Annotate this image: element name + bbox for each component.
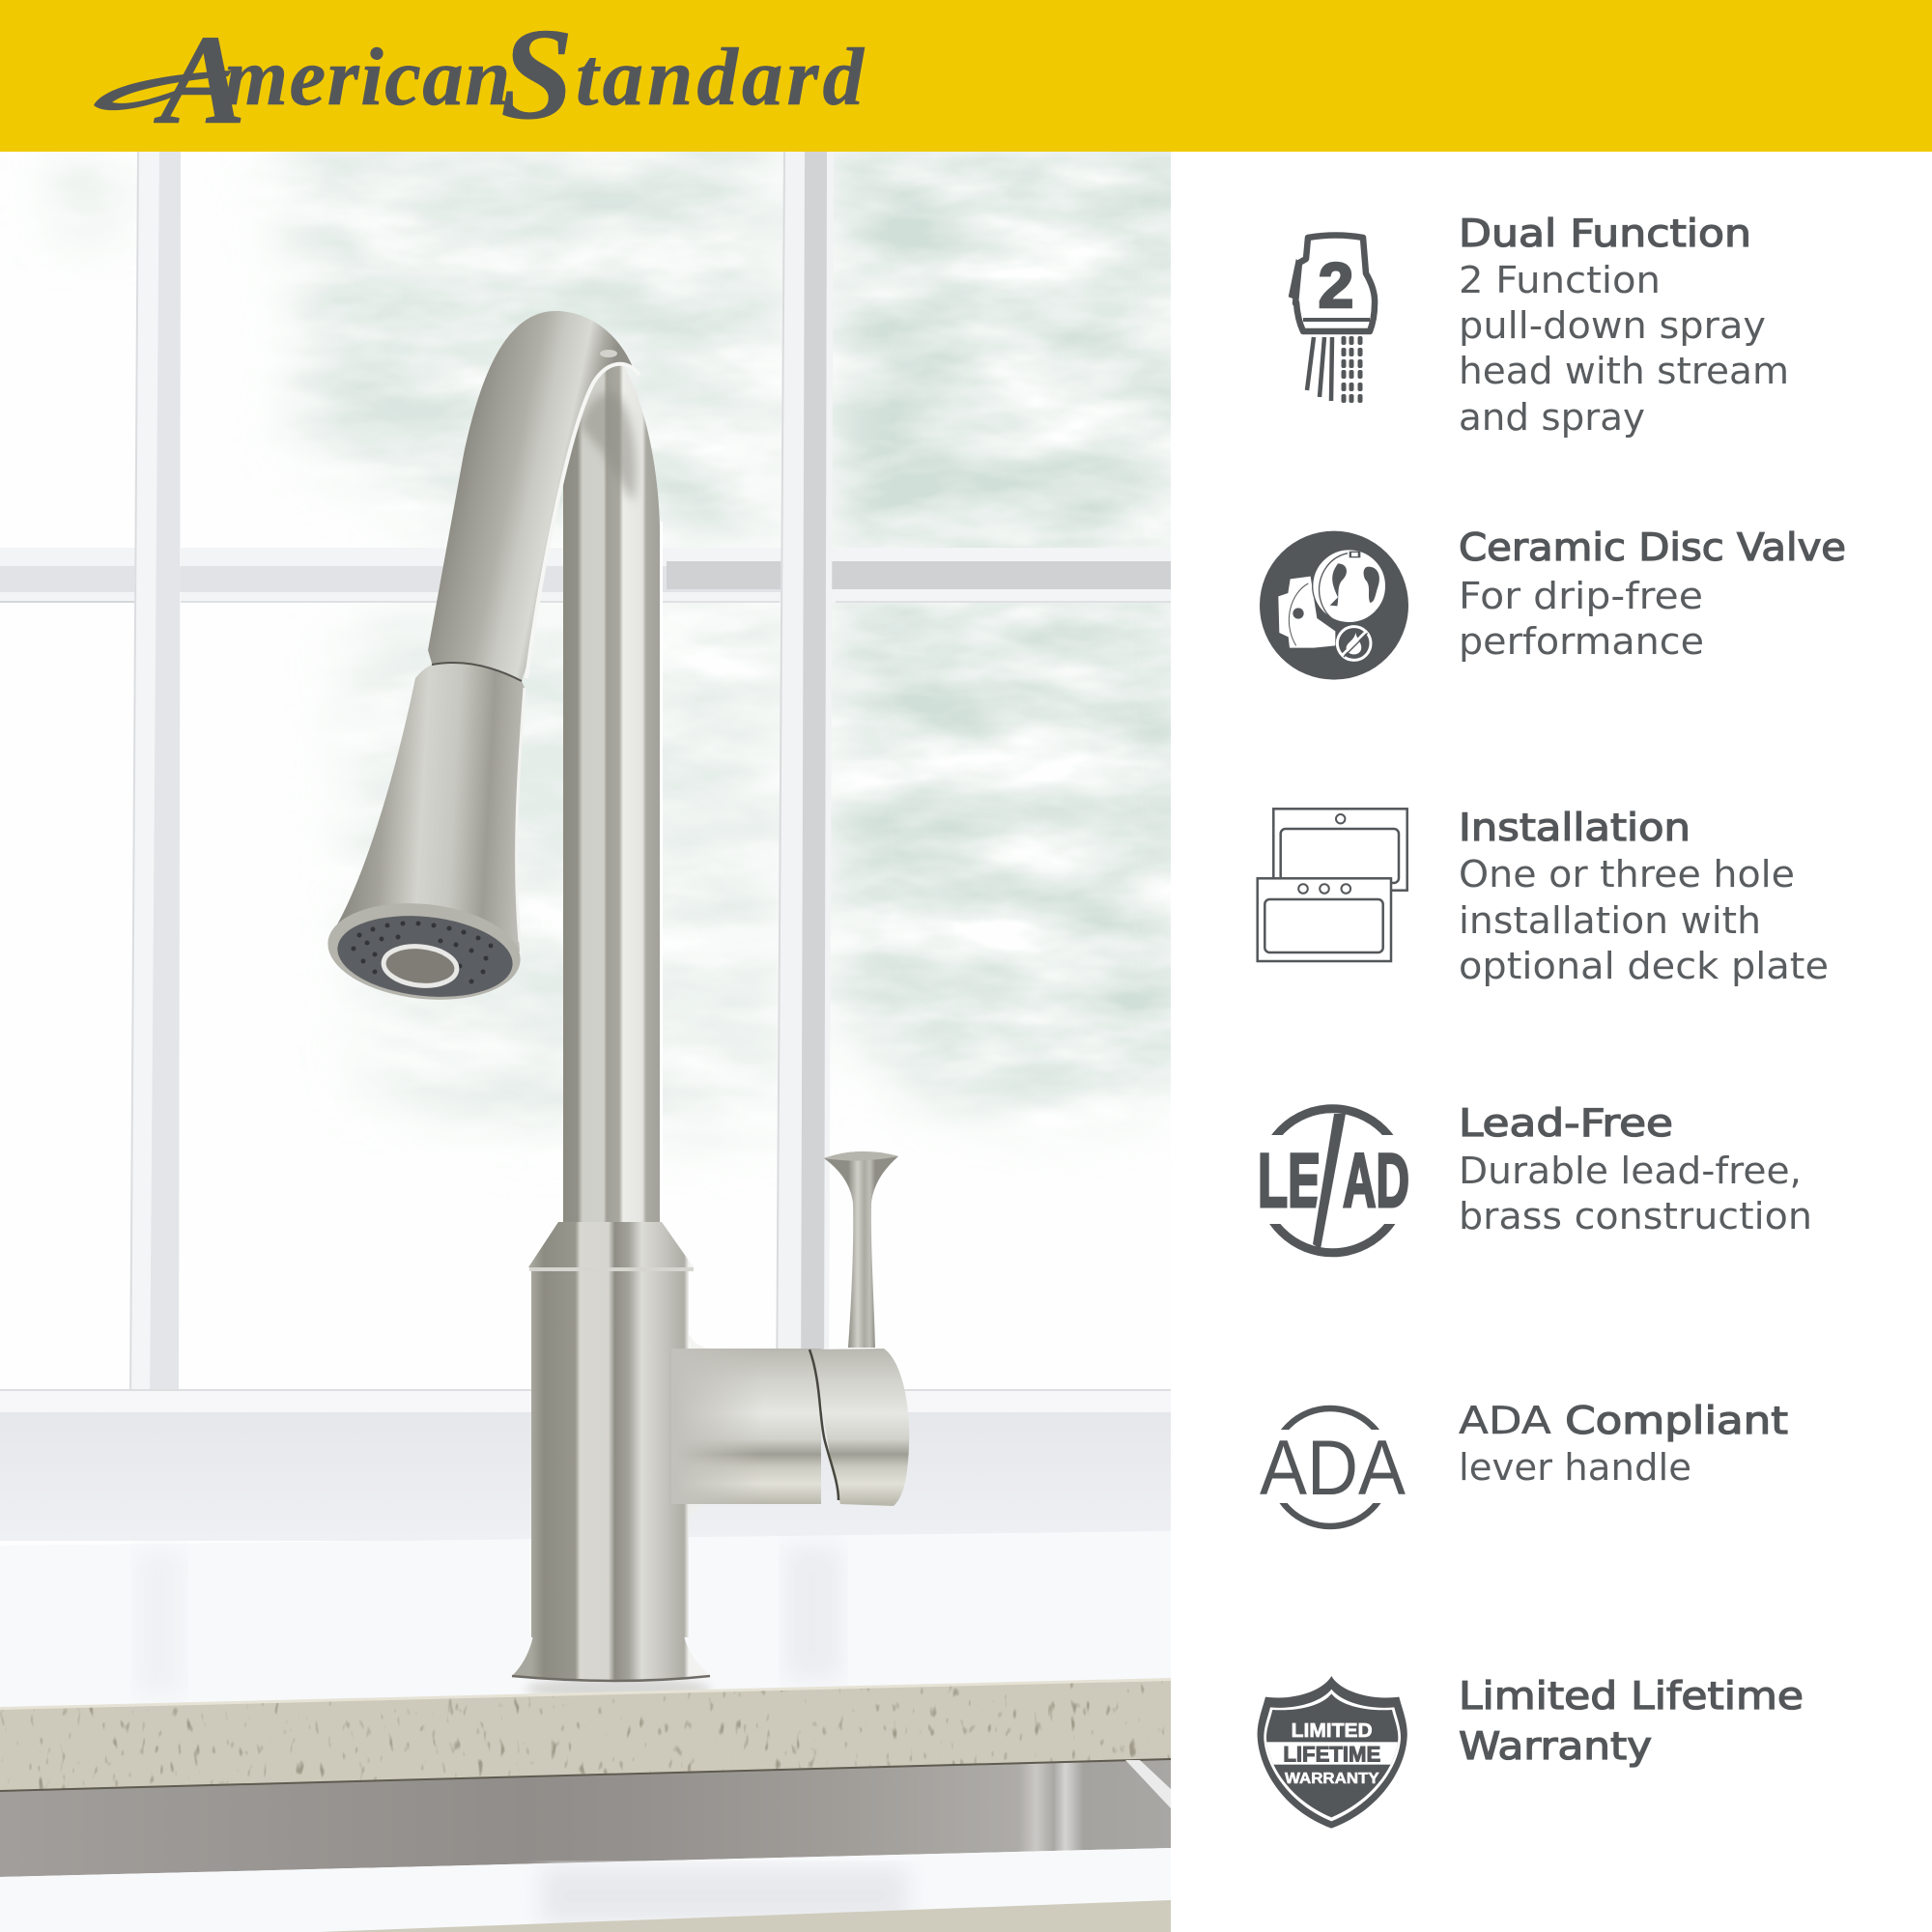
text: lead-free — [1459, 1102, 1812, 1237]
icon: warranty shield: WARRANTY — [1285, 1771, 1379, 1787]
text: ceramic disc valve: Ceramic Disc Valve — [1459, 526, 1846, 570]
icon: lead crossed out — [1258, 1109, 1409, 1253]
feature: ADA compliant — [1260, 1400, 1788, 1526]
text: limited lifetime warranty: Limited Lifetime — [1459, 1675, 1804, 1719]
text: installation: installation with — [1459, 899, 1761, 942]
icon: ceramic disc valve — [1260, 531, 1408, 680]
text: limited lifetime warranty — [1459, 1675, 1804, 1769]
lever arm — [688, 1349, 821, 1504]
feature: lead-free — [1258, 1102, 1812, 1253]
icon: ADA: ADA — [1260, 1425, 1406, 1512]
text: ADA compliant — [1459, 1400, 1788, 1489]
cone collar — [528, 1222, 694, 1267]
text: lead-free: brass construction — [1459, 1195, 1812, 1237]
stone counter edge — [0, 1671, 1171, 1797]
riser tube — [555, 311, 660, 1229]
logo: American Standard: S — [500, 2, 574, 147]
icon: warranty shield: LIFETIME — [1283, 1742, 1380, 1766]
text: installation: optional deck plate — [1459, 945, 1829, 987]
logo: American Standard: merican — [224, 32, 512, 123]
lever cap — [821, 1349, 910, 1506]
photo: kitchen window, counter and faucet — [0, 152, 1171, 1932]
icon: warranty shield: LIMITED — [1292, 1719, 1373, 1742]
feature: ceramic disc valve — [1260, 526, 1846, 680]
logo: American Standard — [94, 2, 867, 151]
text: dual function: head with stream — [1459, 350, 1789, 392]
lower counter and reflection — [0, 1848, 1171, 1932]
icon: spray head: 2 — [1319, 249, 1353, 321]
text: installation: One or three hole — [1459, 853, 1795, 895]
nozzle dots — [352, 922, 493, 983]
text: ADA compliant: lever handle — [1459, 1446, 1691, 1489]
text: dual function: 2 Function — [1459, 259, 1661, 301]
logo: American Standard: A — [154, 8, 246, 151]
icon: spray head — [1291, 236, 1375, 403]
window sill — [129, 1391, 179, 1401]
text: ceramic disc valve — [1459, 526, 1846, 663]
handle post — [824, 1151, 898, 1348]
text: ceramic disc valve: performance — [1459, 620, 1704, 663]
stainless sink — [0, 1760, 1171, 1877]
icon: warranty shield — [1256, 1676, 1410, 1829]
text: dual function: Dual Function — [1459, 213, 1751, 256]
feature: dual function — [1291, 213, 1789, 439]
main body — [531, 1270, 689, 1637]
text: installation — [1459, 807, 1829, 987]
feature: installation — [1258, 807, 1829, 987]
text: limited lifetime warranty: Warranty — [1459, 1725, 1652, 1769]
faucet — [323, 311, 909, 1681]
base flange — [512, 1635, 710, 1681]
window frame — [0, 152, 1171, 1541]
text: ceramic disc valve: For drip-free — [1459, 575, 1703, 617]
text: installation: Installation — [1459, 807, 1690, 850]
logo: American Standard: tandard — [576, 32, 867, 123]
white counter top — [130, 1531, 1171, 1701]
text: dual function — [1459, 213, 1789, 439]
pull-down spray head — [323, 663, 526, 1009]
text: lead-free: Lead-Free — [1459, 1102, 1673, 1146]
header band — [0, 0, 1932, 152]
spout neck — [428, 311, 633, 681]
feature: limited lifetime warranty — [1256, 1675, 1804, 1829]
text: lead-free: Durable lead-free, — [1459, 1150, 1802, 1192]
icon: lead crossed out: AD — [1343, 1137, 1409, 1223]
blurred foliage through the window — [52, 152, 1171, 1144]
text: dual function: and spray — [1459, 396, 1645, 439]
text: dual function: pull-down spray — [1459, 304, 1766, 347]
icon: lead crossed out: LE — [1258, 1137, 1321, 1223]
icon: ADA — [1260, 1408, 1406, 1526]
text: ADA compliant: ADA Compliant — [1459, 1400, 1788, 1443]
icon: sink outlines — [1258, 809, 1407, 961]
